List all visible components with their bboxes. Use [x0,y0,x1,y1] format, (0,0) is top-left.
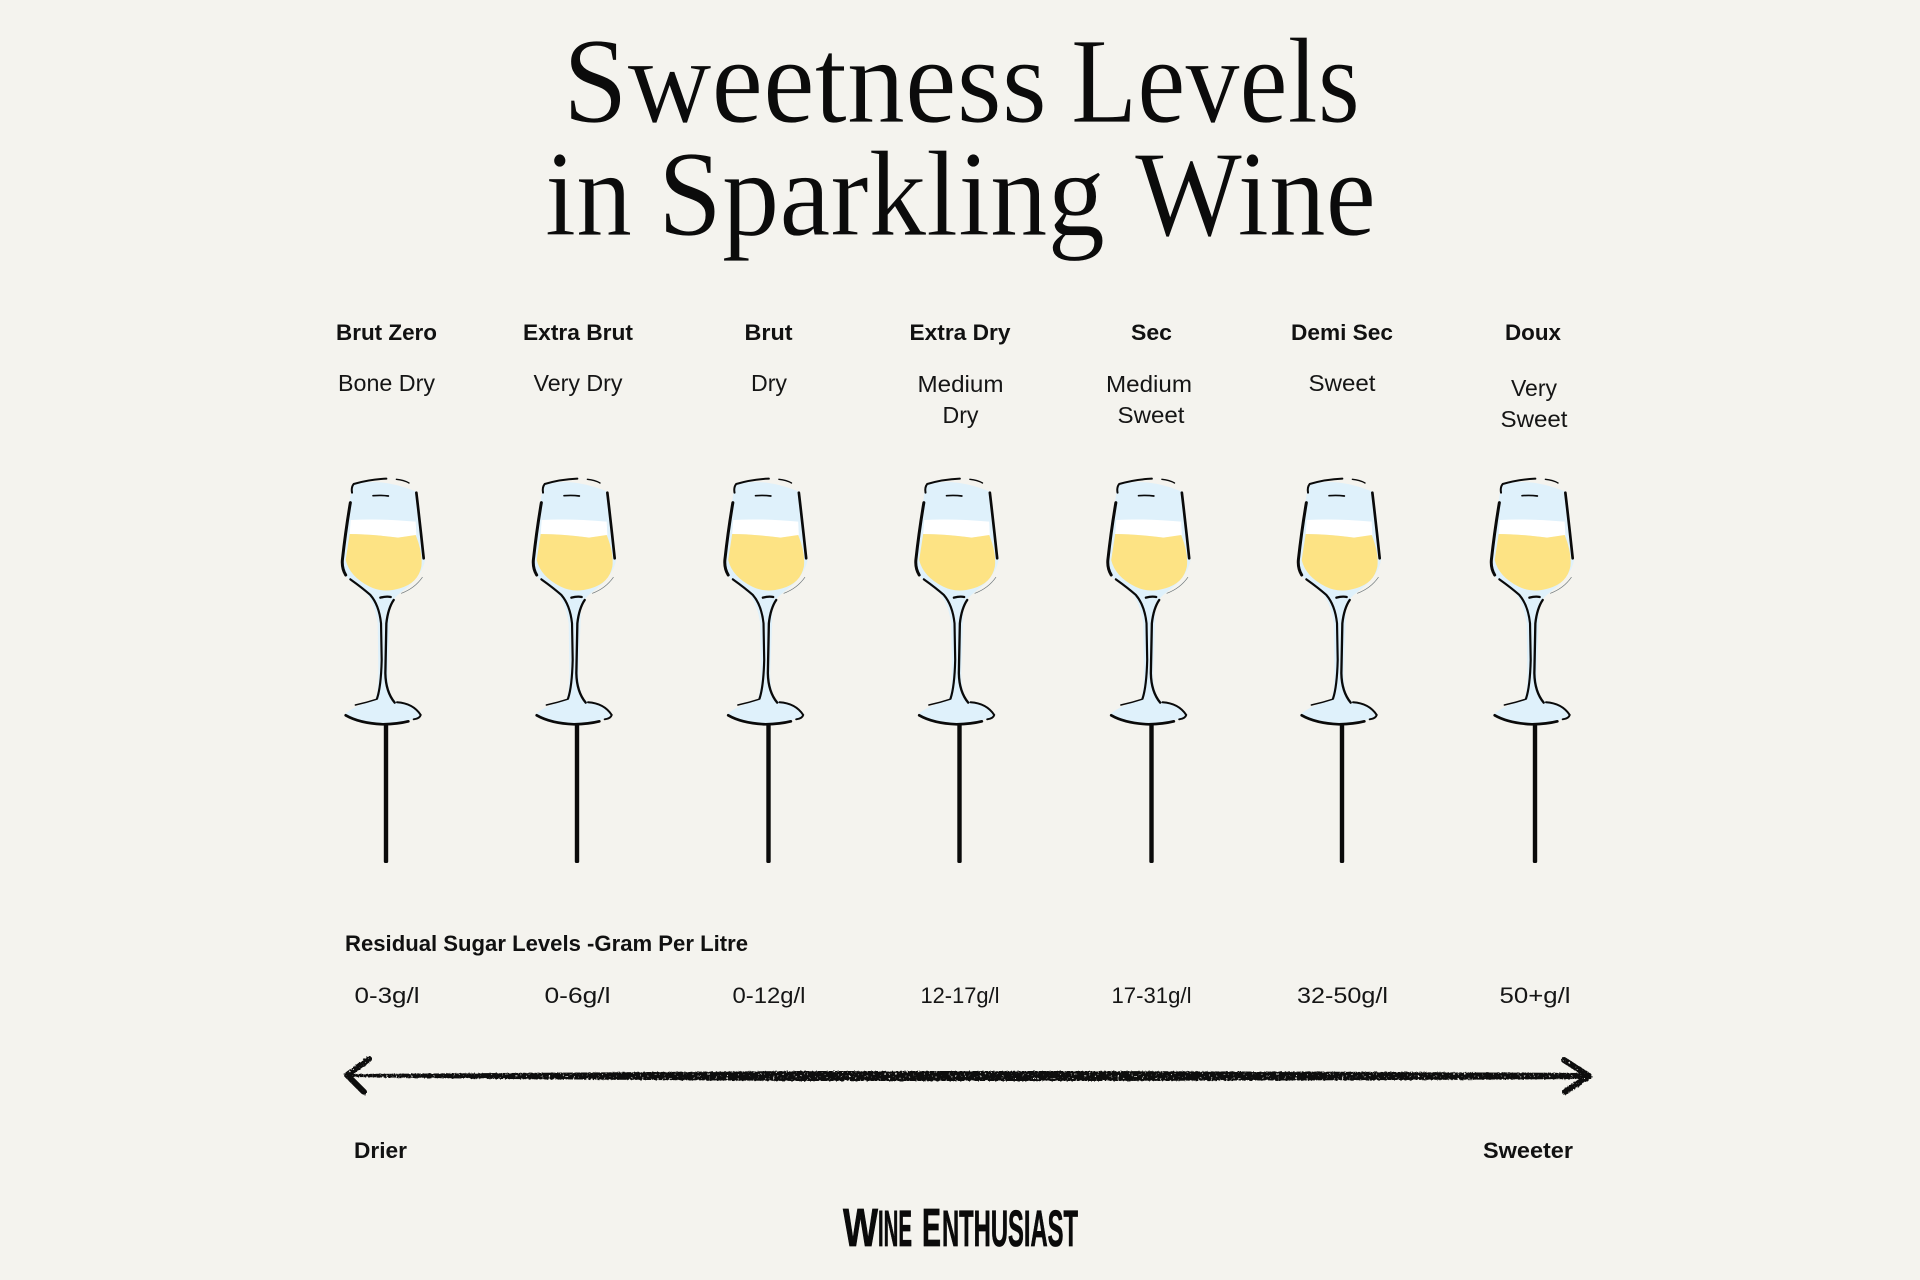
level name: Doux [1505,320,1562,345]
title: Sparkling [658,127,1105,262]
column: Sec: Sweet [1118,402,1185,428]
sugar level values: 0-6g/l [544,983,610,1008]
wine glass with post [1490,479,1574,863]
label: drier: Drier [354,1138,407,1163]
wine glass with post [1106,479,1191,863]
wine glass with post [532,479,616,863]
column: Brut Zero [336,320,437,863]
level name: Extra Dry [910,320,1011,345]
sweetness description: Very Dry [534,370,623,396]
label: sweeter: Sweeter [1483,1138,1573,1163]
residual sugar heading: Residual Sugar Levels -Gram Per Litre [345,931,748,956]
level name: Brut [744,320,793,345]
column: Demi Sec [1291,320,1393,863]
title: Levels [1071,14,1360,149]
sugar level values: 32-50g/l [1297,983,1388,1008]
text: NTHUSIAST [942,1200,1078,1257]
sweetness description: Sweet [1308,370,1376,396]
sugar level values: 17-31g/l [1112,983,1192,1008]
sugar level values [354,983,1570,1008]
level name: Brut Zero [336,320,437,345]
wine glass with post [723,479,808,863]
column: Extra Dry: Dry [942,402,979,428]
sweetness description: Dry [751,370,787,396]
title: in [545,127,632,262]
logo: Wine Enthusiast [843,1198,1078,1258]
sweetness description: Medium [918,371,1004,397]
level name: Extra Brut [523,320,634,345]
title: Sweetness [563,14,1047,149]
sugar level values: 0-3g/l [354,983,420,1008]
wine glass with post [1297,479,1381,863]
logo: Wine Enthusiast: E [922,1198,941,1258]
column: Brut [723,320,808,863]
title: Wine [1135,127,1376,262]
sweetness description: Bone Dry [338,370,436,396]
logo: Wine Enthusiast: INE [878,1200,912,1257]
column: Extra Dry [910,320,1011,863]
column: Doux [1490,320,1574,863]
column: Sec [1106,320,1192,863]
arrow: drier to sweeter scale [347,1059,1589,1092]
logo: Wine Enthusiast: W [843,1198,878,1258]
level name: Demi Sec [1291,320,1393,345]
column: Extra Brut [523,320,634,863]
sugar level values: 12-17g/l [920,983,1000,1008]
wine glass with post [914,479,999,863]
title [545,14,1376,262]
level name: Sec [1131,320,1172,345]
wine glass with post [341,479,425,863]
sweetness description: Medium [1106,371,1192,397]
sweetness description: Very [1511,375,1557,401]
column: Doux: Sweet [1500,406,1568,432]
sugar level values: 50+g/l [1500,983,1570,1008]
sugar level values: 0-12g/l [732,983,806,1008]
